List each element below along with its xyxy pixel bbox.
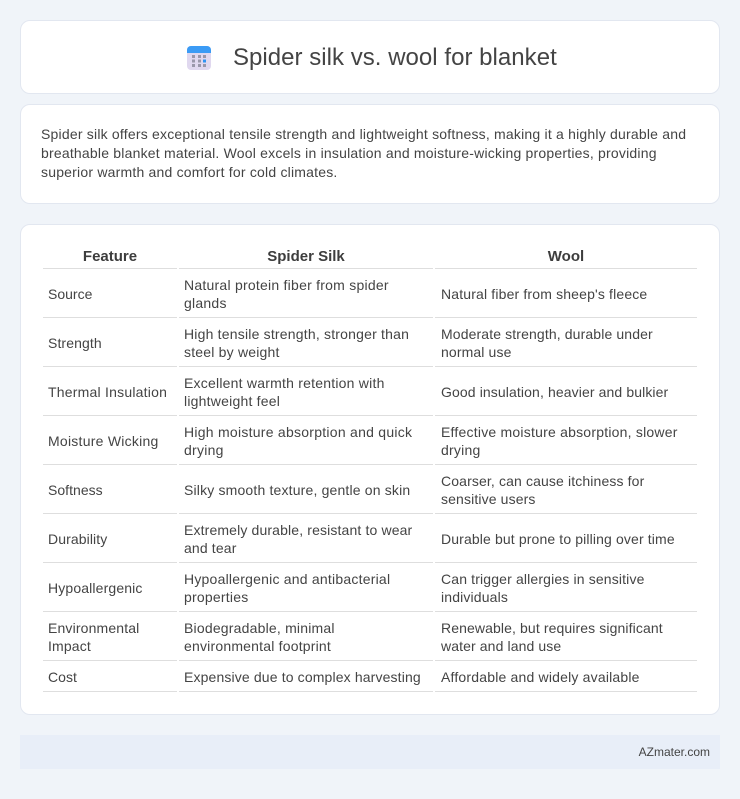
text: High moisture absorption and quick	[184, 424, 412, 440]
intro text panel	[20, 104, 720, 204]
text: and tear	[184, 540, 236, 556]
text: Source	[48, 286, 92, 302]
text: Natural protein fiber from spider	[184, 277, 389, 293]
text: Durable but prone to pilling over time	[441, 531, 675, 547]
text: Extremely durable, resistant to wear	[184, 522, 412, 538]
text: Spider Silk	[267, 248, 345, 265]
text: drying	[184, 442, 224, 458]
text: Hypoallergenic and antibacterial	[184, 571, 390, 587]
text: Affordable and widely available	[441, 669, 640, 685]
text: Moderate strength, durable under	[441, 326, 653, 342]
text: Expensive due to complex harvesting	[184, 669, 421, 685]
text: sensitive users	[441, 491, 536, 507]
text: Can trigger allergies in sensitive	[441, 571, 645, 587]
text: Hypoallergenic	[48, 580, 143, 596]
text: Feature	[83, 248, 137, 265]
title heading: Spider silk vs. wool for blanket	[233, 44, 557, 71]
text: steel by weight	[184, 344, 280, 360]
text: Cost	[48, 669, 77, 685]
text: properties	[184, 589, 248, 605]
text: glands	[184, 295, 227, 311]
row: environmental impact	[43, 620, 697, 661]
text: Coarser, can cause itchiness for	[441, 473, 644, 489]
intro text	[41, 126, 686, 180]
text: Softness	[48, 482, 103, 498]
intro text: Spider silk offers exceptional tensile strength and lightweight softness, making it a highly durable and	[41, 126, 686, 142]
text: Thermal Insulation	[48, 384, 167, 400]
text: drying	[441, 442, 480, 458]
intro text: breathable blanket material. Wool excels in insulation and moisture-wicking properties, providing	[41, 145, 657, 161]
footer bar	[20, 735, 720, 769]
text: Moisture Wicking	[48, 433, 159, 449]
footer credit: AZmater.com	[639, 745, 710, 759]
row: moisture wicking	[43, 424, 697, 465]
intro text: superior warmth and comfort for cold climates.	[41, 164, 338, 180]
text: normal use	[441, 344, 512, 360]
row: thermal insulation	[43, 375, 697, 416]
comparison table panel	[20, 224, 720, 715]
text: Good insulation, heavier and bulkier	[441, 384, 668, 400]
text: individuals	[441, 589, 508, 605]
text: environmental footprint	[184, 638, 331, 654]
text: Renewable, but requires significant	[441, 620, 663, 636]
table header	[43, 248, 697, 269]
row: softness	[43, 473, 697, 514]
text: High tensile strength, stronger than	[184, 326, 409, 342]
text: Strength	[48, 335, 102, 351]
text: Silky smooth texture, gentle on skin	[184, 482, 410, 498]
icon: calendar	[187, 46, 211, 70]
text: lightweight feel	[184, 393, 280, 409]
title card	[20, 20, 720, 94]
row: hypoallergenic	[43, 571, 697, 612]
text: Excellent warmth retention with	[184, 375, 385, 391]
text: Environmental	[48, 620, 139, 636]
text: Wool	[548, 248, 584, 265]
text: Natural fiber from sheep's fleece	[441, 286, 647, 302]
row: cost	[43, 669, 697, 692]
text: water and land use	[441, 638, 561, 654]
text: Impact	[48, 638, 91, 654]
row: source	[43, 277, 697, 318]
row: durability	[43, 522, 697, 563]
row: strength	[43, 326, 697, 367]
text: Biodegradable, minimal	[184, 620, 335, 636]
text: Effective moisture absorption, slower	[441, 424, 678, 440]
text: Durability	[48, 531, 107, 547]
